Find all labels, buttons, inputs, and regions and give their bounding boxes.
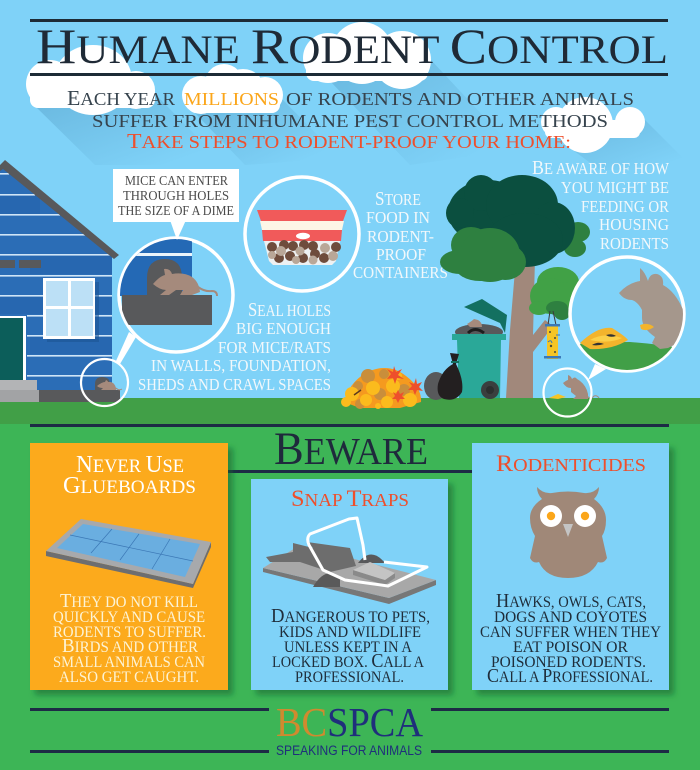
intro text: MILLIONS [184,89,279,109]
leaf pile [341,366,423,409]
callout: dime: THE SIZE OF A DIME [118,204,234,219]
steps [0,380,39,402]
title rule bottom [30,73,668,76]
panel: rodenticides: CAN SUFFER WHEN THEY [480,624,661,641]
intro text: OF RODENTS AND OTHER ANIMALS [286,89,634,109]
ground [0,398,700,424]
panel: rodenticides: EAT POISON OR [513,639,629,656]
callout: dime: THROUGH HOLES [123,189,229,204]
panel: snap traps: KIDS AND WILDLIFE [279,624,421,641]
text: be aware: RODENTS [600,234,669,253]
mouse [153,269,217,296]
panel: snap traps: DANGEROUS TO PETS, [271,606,430,627]
panel: rodenticides: RODENTICIDES [496,451,646,476]
small circle: mouse and seed [544,368,599,416]
logo: BCSPCA: BCSPCA [276,699,423,745]
callout: dime [113,169,239,240]
large mouse [619,268,684,349]
roof [0,160,119,259]
clouds [26,22,695,170]
text: be aware: HOUSING [599,215,669,234]
icon: owl [530,487,607,578]
panel: snap traps: UNLESS KEPT IN A [284,639,413,656]
panel: glueboards: ALSO GET CAUGHT. [59,669,199,686]
text: seal holes: SEAL HOLES [248,299,331,321]
text: be aware [532,157,669,253]
logo: BCSPCA: SPEAKING FOR ANIMALS [276,743,422,758]
zoom circle: food container [245,177,359,291]
text: be aware: FEEDING OR [581,197,669,216]
icon: glueboard [46,519,211,588]
text: seal holes: BIG ENOUGH [236,319,331,338]
rule under beware [228,470,472,473]
pointer to zoom circle [116,332,136,364]
panel: snap traps [251,479,448,690]
door [0,316,26,381]
text: be aware: YOU MIGHT BE [561,178,669,197]
panel: glueboards: NEVER USE [76,452,184,478]
text: store food: PROOF [376,245,426,264]
lower panel background [0,424,700,770]
panel: rodenticides: POISONED RODENTS. [491,654,646,671]
garbage bags [424,353,462,400]
text: seal holes [138,299,331,394]
foundation [39,390,120,402]
garbage bin [452,299,507,399]
intro text: SUFFER FROM INHUMANE PEST CONTROL METHODS [92,111,608,131]
intro text: TAKE STEPS TO RODENT-PROOF YOUR HOME: [127,129,571,153]
seed pile [580,324,654,349]
mouse in bin [467,319,482,327]
panel: glueboards: RODENTS TO SUFFER. [53,624,206,641]
window [43,278,99,342]
text: store food: FOOD IN [366,208,430,227]
panel: glueboards: SMALL ANIMALS CAN [53,654,205,671]
panel: glueboards: BIRDS AND OTHER [62,636,199,657]
panel: glueboards: GLUEBOARDS [63,473,196,499]
title: HUMANE RODENT CONTROL [36,18,668,74]
panel: glueboards: QUICKLY AND CAUSE [53,609,205,626]
title rule top [30,19,668,22]
panel: glueboards [30,443,228,690]
tree [440,175,590,398]
text: be aware: BE AWARE OF HOW [532,157,669,179]
panel: rodenticides [472,443,669,690]
zoom circle: mouse eating seed [570,257,690,380]
text: seal holes: SHEDS AND CRAWL SPACES [138,375,331,394]
beware heading: BEWARE [274,423,428,475]
panel: snap traps: PROFESSIONAL. [295,669,404,686]
text: store food: RODENT- [367,227,434,246]
panel: rodenticides: DOGS AND COYOTES [494,609,647,626]
panel: glueboards: THEY DO NOT KILL [60,591,198,612]
panel: snap traps: LOCKED BOX. CALL A [272,651,425,672]
icon: snap trap [263,518,436,604]
intro text: EACH YEAR [67,86,175,110]
panel: rodenticides: HAWKS, OWLS, CATS, [496,591,646,612]
text: store food: STORE [375,188,421,210]
rule above beware [30,424,669,427]
footer rules [30,708,669,753]
intro text [67,86,634,153]
bird feeder [544,311,561,359]
text: store food [353,188,448,282]
panel: rodenticides: CALL A PROFESSIONAL. [487,666,653,687]
text: seal holes: IN WALLS, FOUNDATION, [151,356,331,375]
small mouse-hole circle [81,359,128,406]
vents [0,260,41,268]
callout: dime: MICE CAN ENTER [125,174,229,189]
zoom circle: mouse at hole [118,238,233,352]
text: seal holes: FOR MICE/RATS [218,338,331,357]
text: store food: CONTAINERS [353,263,448,282]
house [0,160,120,402]
panel: snap traps: SNAP TRAPS [291,486,409,511]
